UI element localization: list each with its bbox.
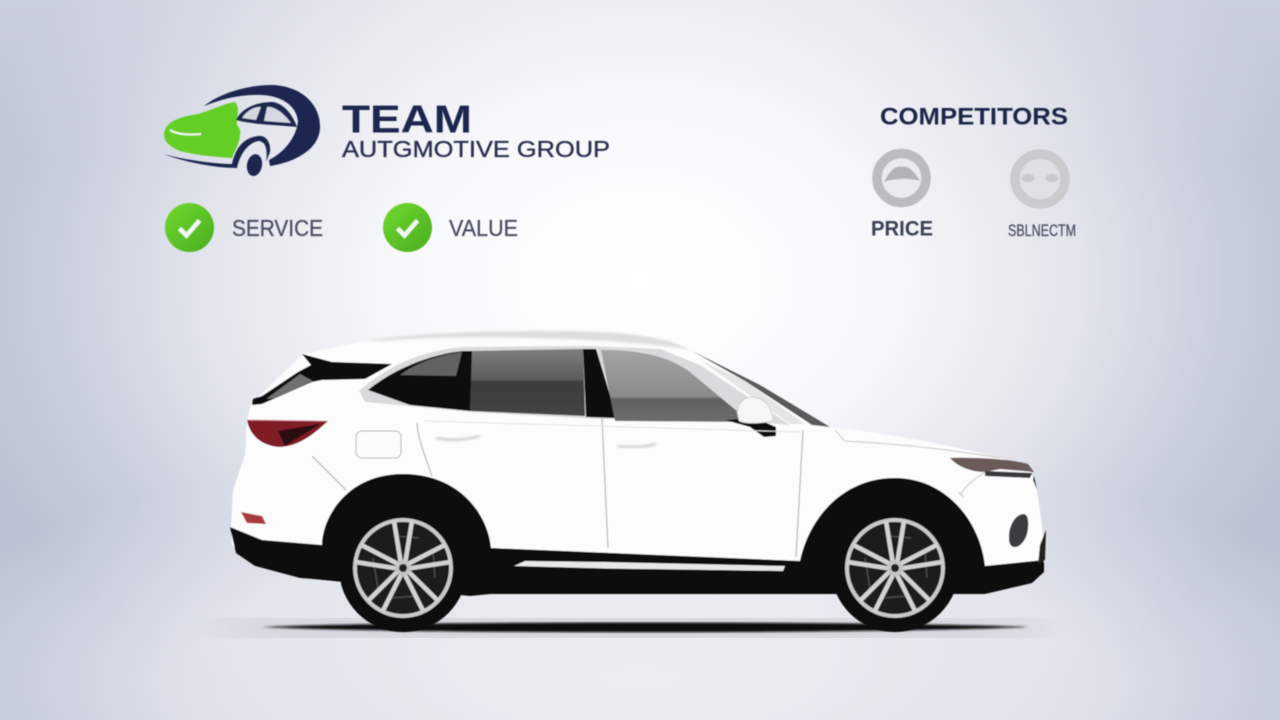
roof shading <box>365 331 690 350</box>
label: price: PRICE <box>871 218 933 240</box>
side windows frame <box>359 346 790 425</box>
hood crease <box>835 430 1000 458</box>
lower black cladding <box>230 474 1044 596</box>
front wheel <box>831 504 959 632</box>
heading: competitors: COMPETITORS <box>880 104 1068 130</box>
rear reflector <box>241 512 266 524</box>
label: garbled second competitor: SBLNECTM <box>1008 221 1076 240</box>
top light wash <box>0 0 1280 160</box>
fog lamp <box>1009 514 1028 547</box>
wheel arch edge <box>958 472 985 497</box>
icon: competitor badge second <box>1015 154 1065 204</box>
white SUV side view <box>230 331 1046 632</box>
windshield edge <box>692 351 830 427</box>
item: service <box>165 203 323 252</box>
ground shadow <box>205 620 1055 636</box>
logo text: TEAM: TEAM <box>342 98 472 142</box>
logo: Team Automotive Group <box>163 85 610 177</box>
tail light <box>247 420 328 447</box>
belt crease <box>424 421 800 432</box>
icon: competitor badge price <box>877 154 926 202</box>
rear quarter window <box>368 351 473 411</box>
door mirror <box>725 397 776 437</box>
logo icon: car with swoosh <box>163 85 320 177</box>
panel: competitors <box>871 104 1076 240</box>
label: value: VALUE <box>449 215 518 241</box>
icon: green check <box>165 203 214 252</box>
sill stripe <box>514 561 785 571</box>
front bumper dark edge <box>1033 476 1046 565</box>
door handles <box>436 436 656 447</box>
fuel door <box>356 431 401 458</box>
label: service: SERVICE <box>232 215 323 241</box>
rear door window <box>470 349 585 416</box>
car body <box>231 332 1045 594</box>
icon: green check <box>383 203 432 252</box>
item: value <box>383 203 518 252</box>
door lines <box>312 418 803 557</box>
b pillar <box>583 349 617 418</box>
logo text: Automotive Group: AUTGMOTIVE GROUP <box>342 136 610 162</box>
rear spoiler <box>252 354 392 405</box>
front door window <box>601 350 750 422</box>
headlight <box>950 458 1034 472</box>
floor glow <box>0 440 1280 720</box>
rear wheel <box>339 504 467 632</box>
